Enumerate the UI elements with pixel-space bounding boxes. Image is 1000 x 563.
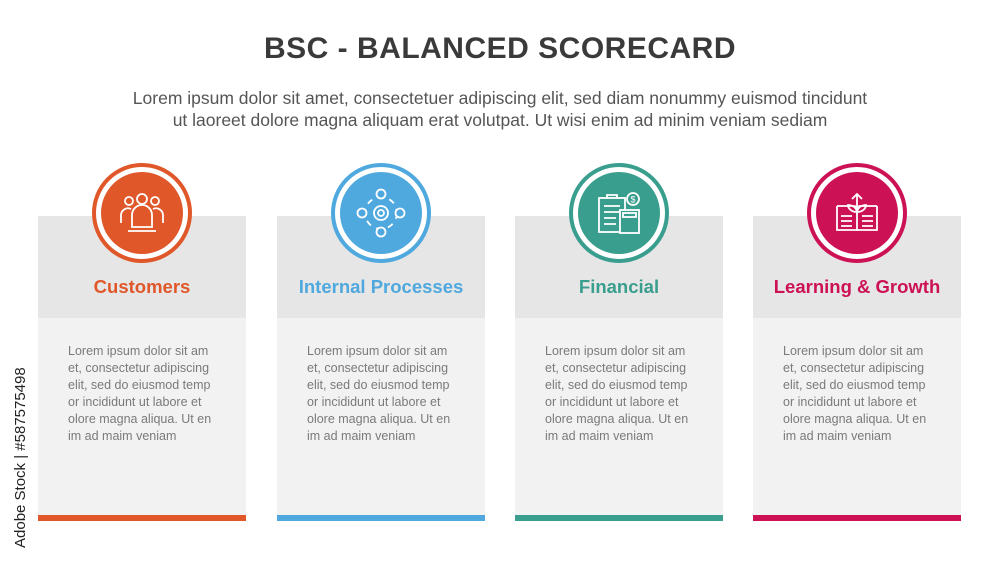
text: or incididunt ut labore et xyxy=(307,395,440,409)
text: or incididunt ut labore et xyxy=(783,395,916,409)
text: et, consectetur adipiscing xyxy=(68,361,209,375)
text: elit, sed do eiusmod temp xyxy=(783,378,925,392)
watermark side text: Adobe Stock | #587575498 xyxy=(12,367,29,548)
panel: learning & growth xyxy=(753,163,961,521)
text xyxy=(545,344,688,443)
subtitle: Lorem ipsum dolor sit amet, consectetuer adipiscing elit, sed diam nonummy euismod tincidunt xyxy=(133,88,867,108)
title: BSC - BALANCED SCORECARD xyxy=(264,32,736,65)
text: Lorem ipsum dolor sit am xyxy=(783,344,923,358)
text: im ad maim veniam xyxy=(545,429,653,443)
text: im ad maim veniam xyxy=(783,429,891,443)
text xyxy=(68,344,211,443)
subtitle xyxy=(133,88,867,130)
icon: processes xyxy=(331,163,431,263)
heading: Learning & Growth xyxy=(774,276,940,297)
heading: Internal Processes xyxy=(299,276,463,297)
text xyxy=(783,344,926,443)
icon: customers xyxy=(92,163,192,263)
text: im ad maim veniam xyxy=(307,429,415,443)
panel: internal processes xyxy=(277,163,485,521)
text: et, consectetur adipiscing xyxy=(307,361,448,375)
heading: Financial xyxy=(579,276,659,297)
text: or incididunt ut labore et xyxy=(545,395,678,409)
text xyxy=(307,344,450,443)
subtitle: ut laoreet dolore magna aliquam erat volutpat. Ut wisi enim ad minim veniam sediam xyxy=(173,110,827,130)
icon: financial xyxy=(569,163,669,263)
icon: learning xyxy=(807,163,907,263)
text: olore magna aliqua. Ut en xyxy=(783,412,926,426)
icon: financial: $ xyxy=(630,194,636,204)
text: elit, sed do eiusmod temp xyxy=(68,378,210,392)
text: Lorem ipsum dolor sit am xyxy=(68,344,208,358)
heading: Customers xyxy=(94,276,190,297)
text: olore magna aliqua. Ut en xyxy=(307,412,450,426)
text: im ad maim veniam xyxy=(68,429,176,443)
text: or incididunt ut labore et xyxy=(68,395,201,409)
text: olore magna aliqua. Ut en xyxy=(68,412,211,426)
panel: customers xyxy=(38,163,246,521)
panel: financial xyxy=(515,163,723,521)
text: et, consectetur adipiscing xyxy=(545,361,686,375)
text: et, consectetur adipiscing xyxy=(783,361,924,375)
text: Lorem ipsum dolor sit am xyxy=(307,344,447,358)
text: elit, sed do eiusmod temp xyxy=(307,378,449,392)
text: Lorem ipsum dolor sit am xyxy=(545,344,685,358)
text: elit, sed do eiusmod temp xyxy=(545,378,687,392)
text: olore magna aliqua. Ut en xyxy=(545,412,688,426)
